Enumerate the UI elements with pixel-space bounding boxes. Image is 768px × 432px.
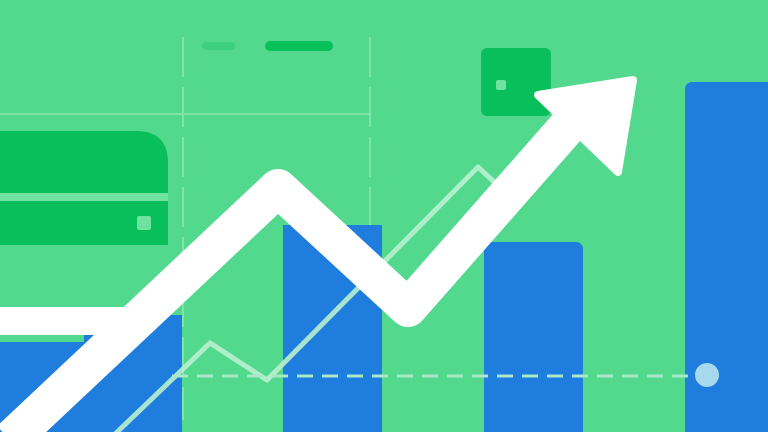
header bars bbox=[202, 41, 333, 51]
card: left panel bbox=[0, 131, 168, 245]
dashed baseline with marker bbox=[172, 363, 719, 387]
icon: top-right square bbox=[481, 48, 551, 116]
arrow: main white growth arrow bbox=[0, 80, 633, 432]
thin trend line bbox=[113, 167, 505, 432]
